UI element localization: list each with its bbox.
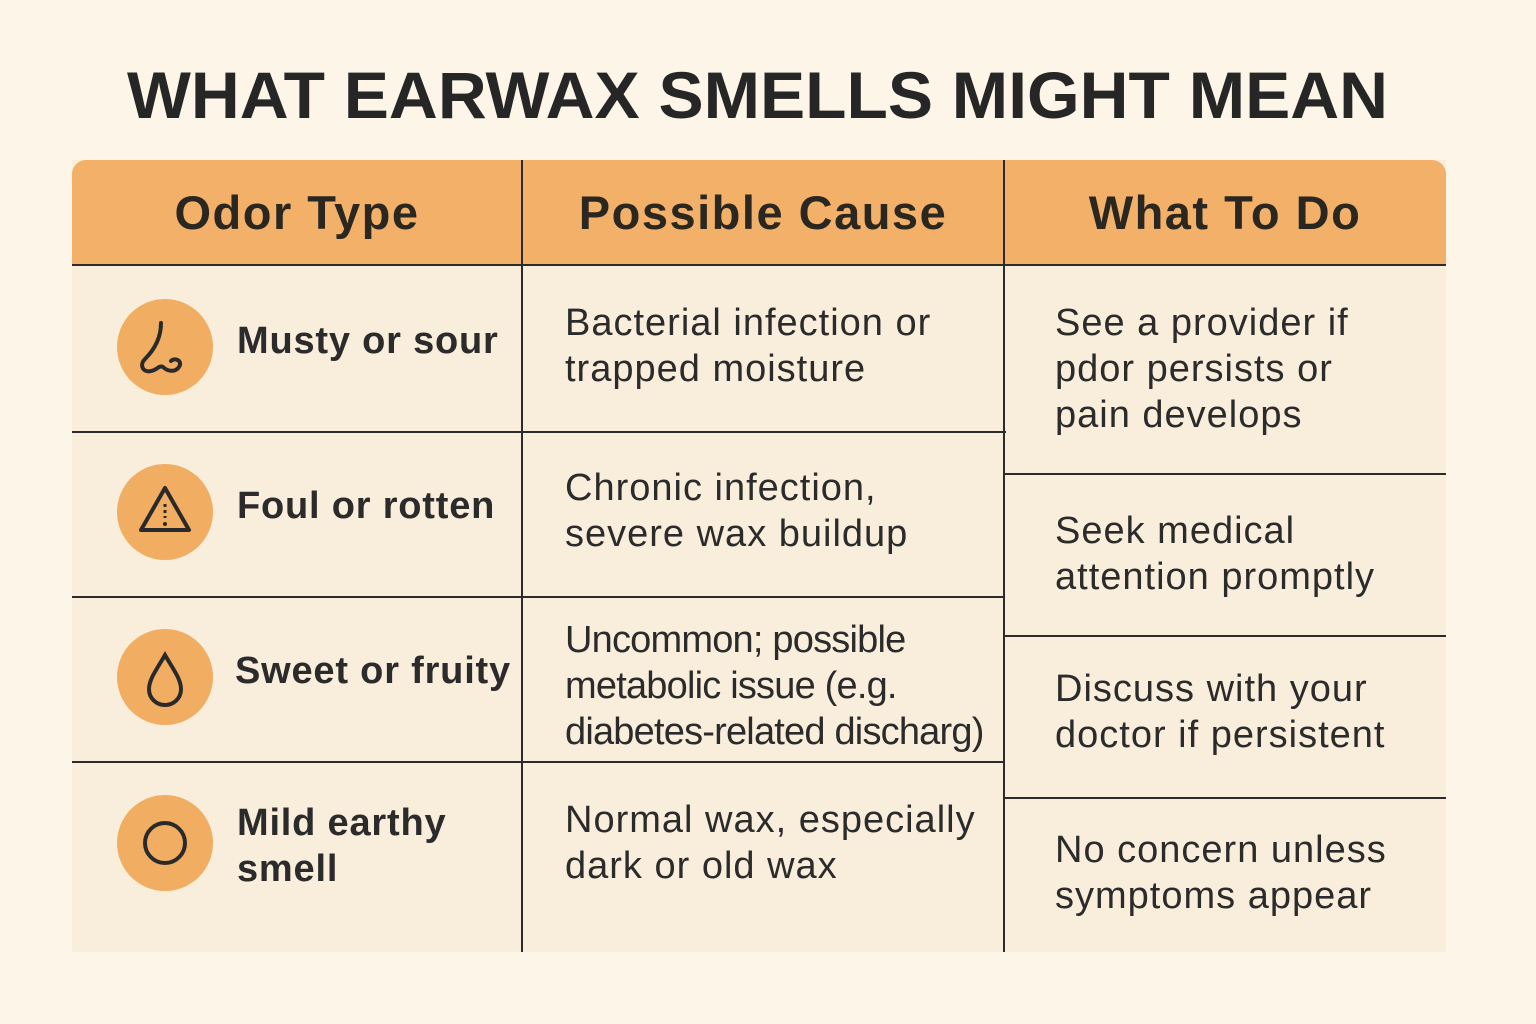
action 1: pain develops: [1055, 394, 1303, 436]
cause 4: Normal wax, especially: [565, 799, 976, 841]
icon: warning: [117, 464, 213, 560]
action 3: doctor if persistent: [1055, 714, 1385, 756]
title: WHAT EARWAX SMELLS MIGHT MEAN: [127, 58, 1388, 132]
header: what to do: What To Do: [1089, 186, 1361, 239]
action 1: pdor persists or: [1055, 348, 1333, 390]
cause 3: [565, 619, 984, 753]
header: odor type: Odor Type: [174, 186, 420, 239]
odor: sweet: Sweet or fruity: [235, 650, 511, 692]
action 4: No concern unless: [1055, 829, 1387, 871]
cause 3: metabolic issue (e.g.: [565, 665, 897, 707]
action 4: symptoms appear: [1055, 875, 1372, 917]
header bar: [72, 160, 1446, 265]
cause 1: Bacterial infection or: [565, 302, 931, 344]
odor: earthy: Mild earthy: [237, 802, 446, 844]
cause 3: diabetes-related discharg): [565, 711, 984, 753]
icon: circle: [117, 795, 213, 891]
action 3: Discuss with your: [1055, 668, 1368, 710]
odor: earthy: [237, 802, 446, 890]
action 1: See a provider if: [1055, 302, 1349, 344]
odor: earthy: smell: [237, 848, 338, 890]
action 1: [1055, 302, 1349, 436]
cause 2: Chronic infection,: [565, 467, 877, 509]
odor: foul: Foul or rotten: [237, 485, 495, 527]
odor: musty: Musty or sour: [237, 320, 499, 362]
action 3: [1055, 668, 1385, 756]
cause 1: [565, 302, 931, 390]
cause 4: dark or old wax: [565, 845, 838, 887]
action 2: Seek medical: [1055, 510, 1295, 552]
action 2: attention promptly: [1055, 556, 1375, 598]
icon: nose: [117, 299, 213, 395]
table: [72, 160, 1446, 952]
action 2: [1055, 510, 1375, 598]
action 4: [1055, 829, 1387, 917]
cause 4: [565, 799, 976, 887]
cause 2: [565, 467, 908, 555]
cause 1: trapped moisture: [565, 348, 866, 390]
header: possible cause: Possible Cause: [579, 186, 947, 239]
cause 2: severe wax buildup: [565, 513, 908, 555]
cause 3: Uncommon; possible: [565, 619, 905, 661]
icon: drop: [117, 629, 213, 725]
